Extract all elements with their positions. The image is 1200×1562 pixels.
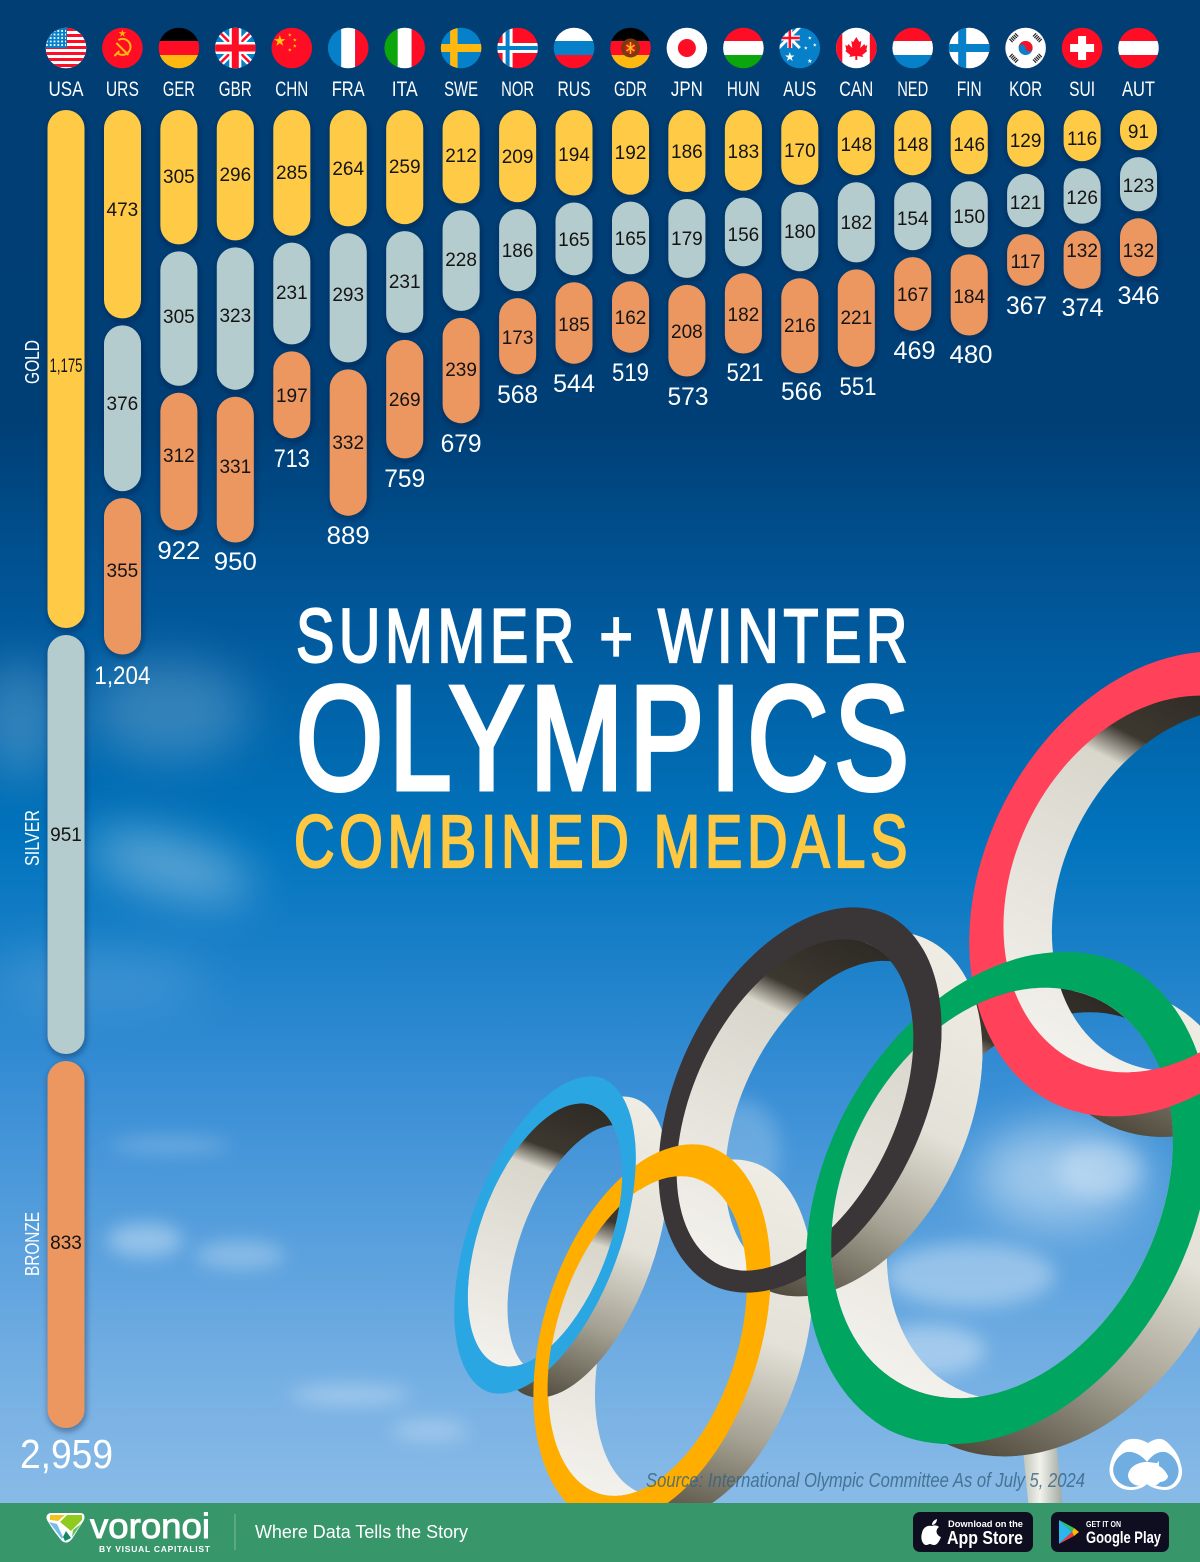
silver bar: 376: 376 (107, 394, 138, 415)
total: 950: 950 (214, 548, 257, 576)
flag: NED (892, 27, 934, 69)
flag: SUI (1061, 27, 1103, 69)
bronze bar: 162 (612, 281, 649, 353)
gold bar: 473 (104, 110, 141, 318)
total: 713: 713 (274, 445, 310, 473)
column: CAN (835, 27, 878, 401)
total: 573: 573 (668, 383, 708, 411)
column: GBR (214, 27, 257, 576)
silver bar: 180: 180 (784, 222, 816, 243)
button: google play: Google Play (1086, 1528, 1161, 1547)
code: SUI: SUI (1069, 78, 1095, 101)
gold bar: 186 (668, 110, 705, 192)
support pole (1021, 1430, 1063, 1510)
column: SUI (1061, 27, 1104, 322)
icon: apple (921, 1519, 941, 1545)
silver bar: 165: 165 (615, 229, 646, 250)
silver bar: 182 (838, 182, 875, 262)
black ring front band (658, 907, 942, 1293)
green ring (764, 921, 1200, 1523)
gold bar: 285 (273, 110, 310, 236)
code: CAN: CAN (839, 78, 873, 101)
total: 469: 469 (894, 337, 936, 365)
column: FRA (327, 27, 370, 550)
total: 367: 367 (1006, 292, 1047, 320)
flag: AUT (1118, 27, 1160, 69)
bronze bar: 208: 208 (671, 322, 703, 343)
silver bar: 154: 154 (897, 209, 929, 230)
button: google play: GET IT ON (1086, 1519, 1121, 1529)
gold bar: 305: 305 (163, 167, 195, 188)
bronze bar: 355: 355 (107, 561, 138, 582)
bronze bar: 269: 269 (389, 390, 421, 411)
flag: NOR (497, 27, 539, 69)
gold bar: 296: 296 (219, 165, 251, 186)
wordmark: voronoi: voronoi (90, 1507, 210, 1546)
button: app store (913, 1512, 1033, 1552)
label: bronze: BRONZE (22, 1212, 44, 1276)
bronze bar: 197: 197 (276, 386, 308, 407)
gold bar: 170 (781, 110, 818, 185)
silver bar: 121: 121 (1010, 193, 1041, 214)
code: ITA: ITA (392, 78, 418, 101)
flag: KOR (1005, 27, 1047, 69)
flag: SWE (440, 27, 482, 69)
bronze bar: 312 (160, 393, 197, 530)
gold bar: 148 (838, 110, 875, 175)
flag: GBR (214, 27, 256, 69)
gold bar: 259: 259 (389, 157, 421, 178)
bronze bar: 132 (1120, 218, 1157, 276)
bronze bar: 197 (273, 351, 310, 438)
gold bar: 1,175: 1,175 (50, 356, 82, 377)
code: NED: NED (897, 78, 928, 101)
gold bar: 146 (951, 110, 988, 174)
total: 568: 568 (497, 381, 538, 409)
silver bar: 150: 150 (953, 207, 985, 228)
blue ring (437, 1074, 704, 1420)
silver bar: 305: 305 (163, 307, 195, 328)
code: HUN: HUN (727, 78, 760, 101)
gold bar: 116 (1064, 110, 1101, 161)
silver bar: 228: 228 (445, 250, 477, 271)
bronze bar: 182 (725, 273, 762, 354)
total: 551: 551 (840, 373, 876, 401)
red ring (939, 621, 1200, 1201)
gold bar: 305 (160, 110, 197, 244)
gold bar: 296 (217, 110, 254, 240)
column: CHN (271, 27, 313, 473)
bronze bar: 132: 132 (1123, 241, 1154, 262)
gold bar: 212 (443, 110, 480, 203)
bronze bar: 162: 162 (615, 308, 646, 329)
bronze bar: 216: 216 (784, 316, 816, 337)
bronze bar: 132 (1064, 231, 1101, 289)
gold bar: 194 (556, 110, 592, 196)
flag: URS (101, 27, 143, 69)
silver bar: 179 (668, 199, 705, 278)
title line: summer + winter: SUMMER + WINTER (296, 594, 912, 679)
gold bar: 264 (330, 110, 367, 226)
silver bar: 121 (1007, 174, 1044, 227)
bronze bar: 239: 239 (445, 360, 477, 381)
gold bar: 129 (1007, 110, 1044, 167)
total: 519: 519 (612, 359, 649, 387)
gold bar: 194: 194 (558, 145, 590, 166)
tagline: Where Data Tells the Story (255, 1521, 469, 1542)
column: GER (157, 27, 200, 565)
total: 1,204: 1,204 (94, 662, 150, 690)
flag: JPN (666, 27, 708, 69)
code: FIN: FIN (957, 78, 982, 101)
gold bar: 285: 285 (276, 163, 308, 184)
column: GDR (610, 27, 652, 387)
silver bar: 182: 182 (840, 213, 872, 234)
silver bar: 123: 123 (1123, 176, 1154, 197)
silver bar: 231: 231 (389, 272, 421, 293)
column: NED (892, 27, 936, 365)
orange band in front of black depth (640, 1144, 770, 1330)
black ring interlock over green (831, 950, 982, 1290)
code: FRA: FRA (332, 78, 365, 101)
code: KOR: KOR (1009, 78, 1042, 101)
divider (234, 1514, 236, 1550)
silver bar: 179: 179 (671, 229, 703, 250)
silver bar: 123 (1120, 157, 1157, 211)
button: google play (1051, 1512, 1169, 1552)
blue ring interlock over orange (548, 1140, 664, 1397)
column: AUT (1118, 27, 1160, 310)
column: NOR (497, 27, 539, 409)
bronze bar: 167: 167 (897, 285, 929, 306)
gold bar: 116: 116 (1067, 129, 1097, 150)
gold bar: 148: 148 (897, 135, 929, 156)
column: AUS (779, 27, 822, 406)
column: ITA (384, 27, 426, 493)
gold bar: 183: 183 (728, 142, 759, 163)
flag: CAN (835, 27, 878, 69)
bronze bar: 312: 312 (163, 446, 195, 467)
silver bar: 951: 951 (50, 825, 82, 846)
silver bar: 156 (725, 198, 762, 266)
bronze bar: 239 (443, 318, 480, 423)
silver bar: 180 (781, 192, 818, 271)
bronze bar: 173 (499, 298, 536, 374)
flag: ITA (384, 27, 426, 69)
total: 346: 346 (1118, 282, 1160, 310)
gold bar: 1,175 (48, 110, 84, 628)
silver bar: 376 (104, 325, 141, 491)
gold bar: 170: 170 (784, 141, 816, 162)
silver bar: 231 (273, 243, 310, 344)
total: 922: 922 (157, 537, 200, 565)
gold bar: 209 (499, 110, 536, 202)
bronze bar: 332: 332 (332, 433, 364, 454)
button: app store: App Store (947, 1528, 1023, 1548)
bronze bar: 117: 117 (1010, 252, 1041, 273)
bronze bar: 221: 221 (840, 308, 872, 329)
gold bar: 264: 264 (332, 159, 364, 180)
code: SWE: SWE (444, 78, 478, 101)
gold bar: 148: 148 (840, 135, 872, 156)
code: RUS: RUS (558, 78, 590, 101)
flag: CHN (271, 27, 313, 69)
gold bar: 183 (725, 110, 762, 191)
flag: RUS (553, 27, 595, 69)
bronze bar: 269 (386, 340, 423, 458)
silver bar: 154 (894, 182, 931, 250)
code: USA: USA (48, 78, 84, 101)
code: GER: GER (163, 78, 195, 101)
silver bar: 186: 186 (502, 241, 533, 262)
flag: GER (158, 27, 200, 69)
Olympic rings sculpture (454, 652, 1200, 1503)
orange ring (512, 1131, 854, 1549)
column: JPN (666, 27, 708, 411)
silver bar: 126 (1064, 168, 1101, 224)
column: KOR (1005, 27, 1047, 320)
column: SWE (440, 27, 482, 458)
code: NOR: NOR (501, 78, 534, 101)
bronze bar: 173: 173 (502, 328, 533, 349)
flag: HUN (722, 27, 764, 69)
footer bar (0, 1503, 1200, 1562)
bronze bar: 221 (838, 269, 875, 367)
silver bar: 231 (386, 231, 423, 333)
total: 759: 759 (384, 465, 425, 493)
button: app store: Download on the (948, 1519, 1023, 1530)
silver bar: 323 (217, 247, 254, 390)
icon: play triangle (1059, 1520, 1079, 1544)
red ring interlock over green (977, 988, 1200, 1137)
bronze bar: 833 (48, 1061, 84, 1428)
gold bar: 146: 146 (953, 135, 985, 156)
code: GBR: GBR (219, 78, 252, 101)
total: 544: 544 (553, 370, 595, 398)
bronze bar: 331 (217, 397, 254, 542)
total: 2,959: 2,959 (20, 1431, 113, 1477)
gold bar: 91 (1120, 110, 1157, 150)
black ring depth (627, 888, 1037, 1340)
gold bar: 192: 192 (615, 143, 646, 164)
silver bar: 293 (330, 233, 367, 362)
silver bar: 951 (48, 635, 84, 1054)
flag: AUS (779, 27, 821, 69)
title line: olympics: OLYMPICS (296, 656, 915, 821)
silver bar: 231: 231 (276, 283, 308, 304)
total: 521: 521 (726, 359, 764, 387)
code: AUS: AUS (783, 78, 816, 101)
bronze bar: 332 (330, 369, 367, 516)
column: URS (94, 27, 150, 690)
silver bar: 323: 323 (219, 306, 251, 327)
column: RUS (553, 27, 595, 398)
silver bar: 126: 126 (1066, 188, 1098, 209)
source note: Source: International Olympic Committee As of July 5, 2024 (646, 1470, 1085, 1492)
silver bar: 165: 165 (558, 230, 590, 251)
silver bar: 156: 156 (728, 225, 759, 246)
bronze bar: 184: 184 (953, 287, 985, 308)
code: GDR: GDR (614, 78, 647, 101)
bronze bar: 355 (104, 498, 141, 654)
flag: USA (45, 27, 87, 69)
medal type labels (22, 340, 44, 1276)
gold bar: 473: 473 (107, 200, 138, 221)
total: 566: 566 (781, 378, 822, 406)
label: silver: SILVER (22, 810, 44, 866)
silver bar: 305 (160, 251, 197, 386)
gold bar: 148 (894, 110, 931, 175)
gold bar: 192 (612, 110, 649, 195)
code: AUT: AUT (1122, 78, 1155, 101)
gold bar: 91: 91 (1128, 122, 1149, 143)
gold bar: 212: 212 (445, 146, 477, 167)
bronze bar: 185 (556, 282, 592, 364)
bronze bar: 184 (951, 254, 988, 336)
silver bar: 186 (499, 209, 536, 291)
column: FIN (948, 27, 992, 369)
bronze bar: 208 (668, 285, 705, 376)
gold bar: 186: 186 (671, 142, 703, 163)
silver bar: 150 (951, 181, 988, 247)
bronze bar: 167 (894, 257, 931, 331)
code: URS: URS (106, 78, 139, 101)
bronze bar: 132: 132 (1066, 241, 1098, 262)
total: 889: 889 (327, 522, 370, 550)
total: 480: 480 (950, 341, 992, 369)
column: HUN (722, 27, 764, 387)
flag: GDR (610, 27, 652, 69)
gold bar: 129: 129 (1010, 131, 1041, 152)
title line: combined medals: COMBINED MEDALS (294, 800, 912, 883)
column: USA (20, 27, 113, 1477)
code: CHN: CHN (275, 78, 308, 101)
bronze bar: 216 (781, 278, 818, 373)
bronze bar: 833: 833 (50, 1233, 82, 1254)
label: gold: GOLD (22, 340, 44, 384)
gold bar: 259 (386, 110, 423, 224)
total: 374: 374 (1062, 294, 1104, 322)
bronze bar: 185: 185 (558, 315, 590, 336)
flag: FRA (327, 27, 369, 69)
title (294, 594, 915, 883)
icon: visual capitalist binoculars and piggy bank (1110, 1439, 1182, 1490)
logo mark: voronoi (46, 1513, 84, 1543)
bronze bar: 117 (1007, 234, 1044, 286)
silver bar: 165 (612, 202, 649, 274)
orange ring interlock over black (640, 1144, 710, 1190)
total: 679: 679 (441, 430, 482, 458)
silver bar: 165 (556, 202, 592, 275)
bronze bar: 182: 182 (728, 305, 759, 326)
code: JPN: JPN (671, 78, 703, 101)
bronze bar: 331: 331 (219, 457, 251, 478)
silver bar: 228 (443, 210, 480, 311)
silver bar: 293: 293 (332, 285, 364, 306)
byline: BY VISUAL CAPITALIST (99, 1544, 211, 1554)
gold bar: 209: 209 (502, 147, 533, 168)
flag: FIN (948, 27, 990, 69)
